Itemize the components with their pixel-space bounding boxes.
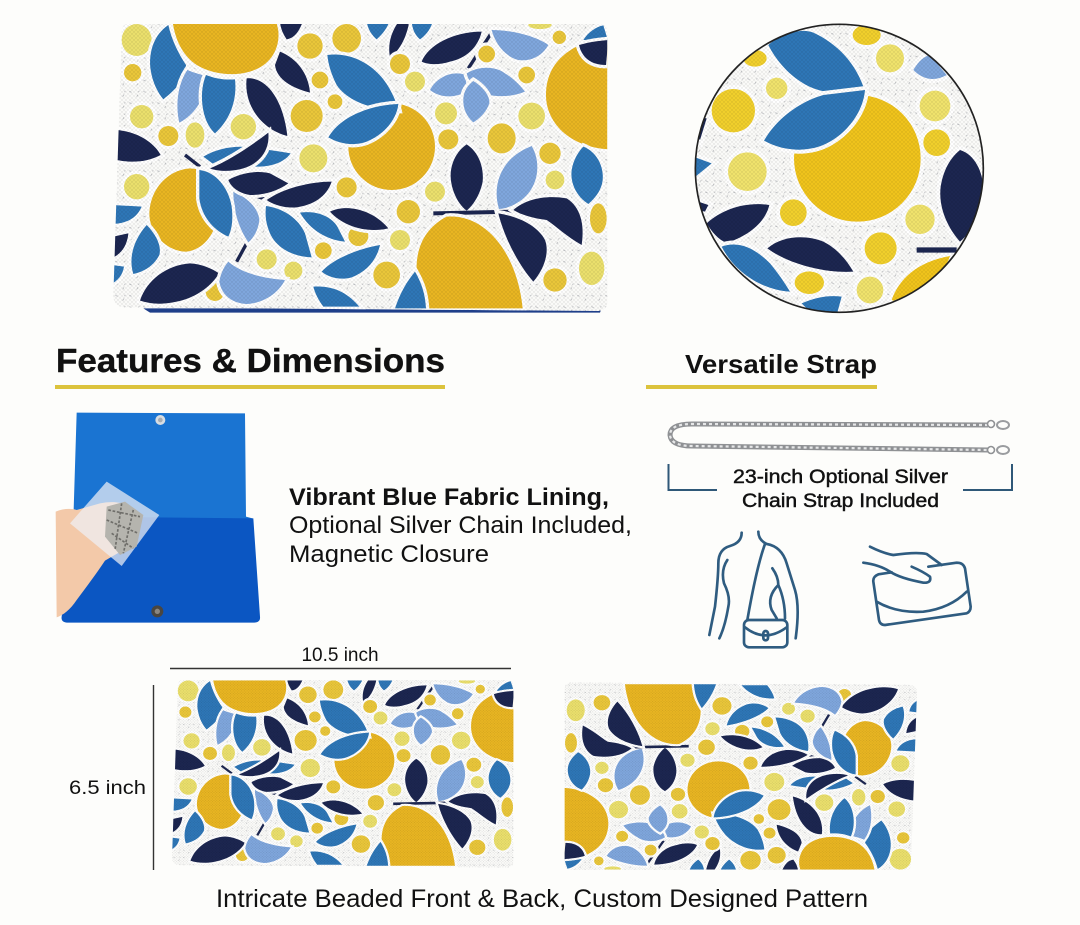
photo: clutch front small	[171, 678, 514, 868]
heading: Features & Dimensions: Features & Dimensions	[56, 342, 445, 379]
callout: chain strap length: 23-inch Optional Silver	[733, 467, 949, 488]
icon: clutch carried in hand	[863, 547, 971, 625]
icon: crossbody wear	[709, 532, 798, 647]
photo: clutch back small	[564, 682, 918, 872]
heading: Versatile Strap	[646, 349, 877, 389]
caption: Intricate Beaded Front & Back, Custom Designed Pattern	[216, 885, 868, 913]
photo: blue lining with chain bag in hand	[56, 413, 260, 623]
callout: chain strap length: Chain Strap Included	[742, 491, 939, 512]
photo: beaded clutch front	[112, 21, 608, 313]
photo: silver chain strap	[670, 420, 1009, 454]
text: lining description	[289, 484, 632, 568]
dimension: width 10.5 inch: 10.5 inch	[301, 645, 379, 666]
text: lining description: Vibrant Blue Fabric Lining,	[289, 484, 609, 511]
heading: Versatile Strap: Versatile Strap	[685, 349, 877, 379]
dimension: height 6.5 inch: 6.5 inch	[69, 778, 146, 799]
text: lining description: Magnetic Closure	[289, 541, 489, 568]
text: lining description: Optional Silver Chain Included,	[289, 512, 632, 539]
detail circle: bead close-up	[693, 24, 984, 315]
callout: chain strap length	[668, 464, 1012, 512]
